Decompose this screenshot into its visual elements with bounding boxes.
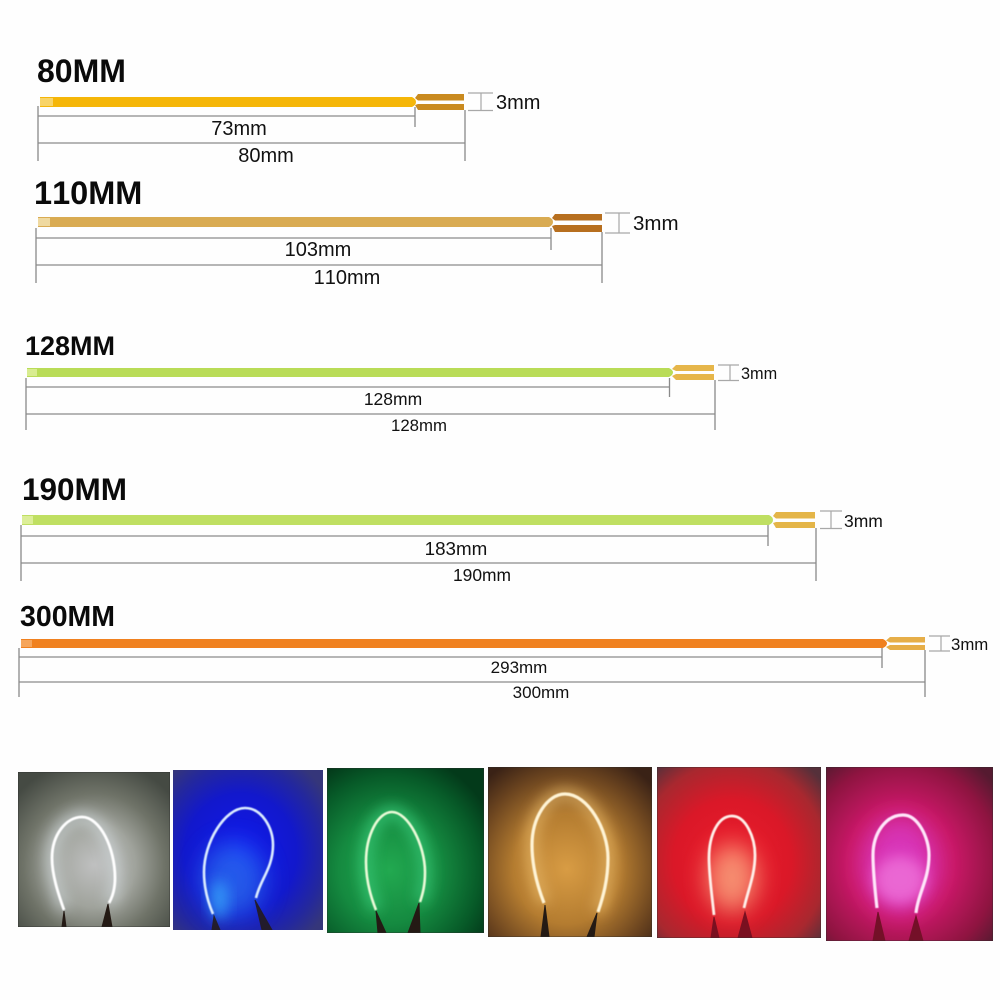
strip body bbox=[38, 217, 553, 227]
panel: 190MM strip bbox=[21, 471, 883, 585]
photo: white loop bbox=[18, 772, 170, 927]
width bracket bbox=[468, 93, 493, 110]
panel: 110MM strip bbox=[34, 175, 679, 289]
strip end highlight bbox=[40, 98, 53, 106]
solder pads bbox=[415, 94, 464, 110]
label: 110mm: 110mm bbox=[314, 267, 380, 289]
dimension lines bbox=[21, 525, 816, 581]
solder pads bbox=[552, 214, 602, 232]
dimension lines bbox=[19, 648, 925, 697]
strip body bbox=[40, 97, 416, 107]
width bracket bbox=[820, 511, 842, 528]
strip end highlight bbox=[27, 369, 37, 376]
solder pads bbox=[773, 512, 815, 528]
strip end highlight bbox=[22, 516, 33, 524]
label: 80mm: 80mm bbox=[238, 145, 294, 167]
strip body bbox=[21, 639, 887, 648]
label: 128mm upper: 128mm bbox=[364, 389, 422, 409]
heading: 300MM: 300MM bbox=[20, 601, 115, 633]
heading: 128MM: 128MM bbox=[25, 331, 115, 361]
dimension lines bbox=[26, 378, 715, 430]
label: 103mm: 103mm bbox=[285, 239, 351, 261]
strip body bbox=[27, 368, 673, 377]
label: 190mm: 190mm bbox=[453, 565, 511, 585]
panel: 300MM strip bbox=[19, 601, 988, 702]
label: 128mm lower: 128mm bbox=[391, 416, 447, 435]
dimension lines bbox=[38, 106, 465, 161]
solder pads bbox=[886, 637, 925, 650]
strip body bbox=[22, 515, 773, 525]
label: 3mm: 3mm bbox=[496, 92, 540, 114]
photo: pink loop bbox=[826, 767, 993, 941]
label: 3mm: 3mm bbox=[741, 365, 777, 383]
label: 293mm: 293mm bbox=[491, 658, 547, 677]
label: 3mm: 3mm bbox=[844, 511, 883, 531]
label: 73mm: 73mm bbox=[211, 118, 267, 140]
width bracket bbox=[929, 636, 950, 651]
heading: 110MM: 110MM bbox=[34, 175, 142, 211]
strip end highlight bbox=[38, 218, 50, 226]
dimension lines bbox=[36, 228, 602, 283]
photo: warm white loop bbox=[488, 767, 652, 937]
label: 3mm: 3mm bbox=[951, 635, 988, 654]
solder pads bbox=[672, 365, 714, 380]
heading: 190MM: 190MM bbox=[22, 471, 127, 507]
label: 3mm: 3mm bbox=[633, 212, 679, 235]
photo: red loop bbox=[657, 767, 821, 938]
label: 300mm: 300mm bbox=[513, 683, 569, 702]
heading: 80MM: 80MM bbox=[37, 53, 126, 89]
panel: 80MM strip bbox=[37, 53, 540, 167]
strip end highlight bbox=[21, 640, 32, 647]
photo: green loop bbox=[327, 768, 484, 933]
width bracket bbox=[718, 365, 739, 380]
photo: blue loop bbox=[173, 770, 323, 930]
label: 183mm: 183mm bbox=[425, 538, 487, 559]
panel: 128MM strip bbox=[25, 331, 777, 435]
width bracket bbox=[605, 213, 630, 233]
